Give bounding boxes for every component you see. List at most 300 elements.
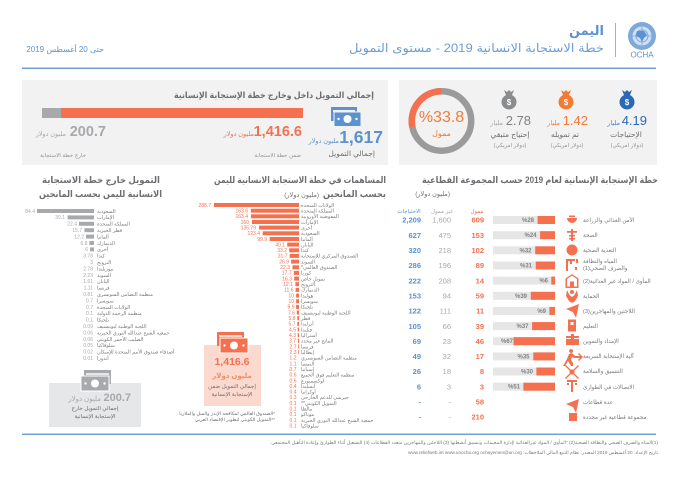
total funding figure: 1,617	[339, 127, 383, 147]
unfunded column: 3	[447, 382, 451, 391]
donor names	[300, 203, 373, 430]
donor names: إسبانيا	[301, 367, 315, 373]
values: 12.2	[74, 234, 84, 240]
requirements column: 2,209	[402, 216, 421, 225]
callout: funding outside the plan: إجمالي التمويل خارج	[72, 406, 119, 412]
funded column: 89	[476, 261, 484, 270]
footnotes: *الصندوق العالمي لمكافحة الإيدز والسل والملاريا	[179, 411, 275, 417]
values: 0.4	[290, 384, 297, 390]
values: 15.7	[72, 228, 82, 234]
donor names: أصدقاء صندوق الأمم المتحدة للإسكان	[97, 349, 175, 356]
panel: funding outside the plan by donor	[25, 175, 175, 427]
values: 39.1	[55, 215, 65, 221]
donor names: موناكو	[300, 412, 314, 418]
values: 33.2	[277, 248, 287, 254]
values: 16.3	[282, 276, 292, 282]
callout: funding outside the plan: 200.7	[103, 392, 131, 404]
values: 2.23	[83, 273, 93, 279]
requirements column: -	[418, 413, 422, 422]
inside plan figure: 1,416.6	[254, 124, 302, 140]
sector labels: التعليم	[583, 324, 598, 330]
donut chart: percent funded: %33.8	[419, 109, 464, 126]
requirements column: 222	[408, 276, 421, 285]
icon: education	[568, 320, 576, 332]
donor names: الصندوق العالمي*	[301, 265, 337, 271]
donor names: النرويج	[97, 260, 111, 266]
requirements column: 153	[408, 292, 421, 300]
donor names: أوكرانيا	[301, 389, 316, 396]
heading: التمويل خارج خطة الاستجابة	[42, 175, 160, 186]
donor names: إيطاليا	[301, 350, 315, 356]
sector labels: الأمن الغذائي والزراعة	[583, 216, 635, 224]
donor names: ألمانيا	[301, 236, 313, 243]
donor names: اللجنة الوطنية ليونيسيف	[97, 324, 147, 330]
total funding figure: مليون دولار	[308, 138, 339, 145]
stat: funded	[546, 90, 588, 149]
unfunded column: 218	[438, 246, 451, 255]
icon: nutrition	[566, 244, 578, 256]
donor names: بلجيكا	[301, 305, 313, 311]
donor names: فرنسا	[301, 344, 314, 350]
callout: funding within the plan: إجمالي التمويل ضمن	[208, 384, 256, 390]
values: 0.81	[83, 292, 93, 298]
values: 11.6	[284, 288, 294, 294]
callout: funding within the plan: 1,416.6	[214, 356, 250, 368]
donor names: ألمانيا	[97, 233, 109, 240]
stat: funded: 1.42	[563, 113, 588, 128]
icon: health	[567, 229, 577, 241]
stacked funding bar	[42, 108, 303, 118]
icon: food security	[567, 216, 577, 223]
values: 6.8	[81, 241, 88, 247]
inside plan figure	[223, 124, 302, 159]
donor names: الإمارات	[97, 215, 114, 221]
values: 5.8	[289, 316, 296, 322]
sector labels: عدة قطاعات	[583, 400, 613, 406]
sector labels: مجموعة قطاعية غير محددة	[583, 415, 646, 421]
outside plan figure: 200.7	[70, 124, 106, 140]
stat: funded: (دولار امريكي)	[551, 142, 584, 149]
unfunded column: -	[448, 413, 452, 422]
unfunded column: 196	[438, 261, 451, 270]
icon: money bag grey: $	[507, 98, 512, 107]
values: 0.09	[83, 324, 93, 330]
donor names: منظمة التضامن السويسري	[301, 356, 357, 362]
funded column: 46	[476, 337, 484, 346]
icon: shelter	[566, 274, 578, 288]
values: 0.1	[290, 412, 297, 418]
percent funded bars: %35	[517, 354, 530, 360]
funded column: 8	[480, 367, 484, 376]
donor names: النرويج	[301, 282, 315, 288]
donor names: الصندوق المركزي للإستجابة	[301, 254, 358, 260]
donor names: فنلندا	[301, 327, 313, 333]
stat: requirements	[606, 90, 647, 149]
donor names: قطر	[300, 316, 311, 322]
funded column: 102	[471, 246, 484, 255]
column headers: ممول	[471, 209, 484, 215]
heading: إجمالي التمويل داخل وخارج خطة الإستجابة الإنسانية	[174, 90, 374, 101]
values: 12.1	[283, 282, 293, 288]
icon: coordination	[565, 365, 579, 379]
outside plan figure	[35, 124, 106, 159]
inside plan figure: ضمن خطة الاستجابة	[254, 153, 301, 159]
outside plan figure: مليون دولار	[35, 131, 66, 138]
bar chart: donors within the plan	[198, 203, 373, 430]
donor names: المانح غير محدد	[301, 339, 333, 345]
values: 6	[85, 247, 88, 253]
donor names: سلوفاكيا	[97, 343, 115, 349]
outside plan figure: خارج خطة الاستجابة	[40, 153, 86, 159]
donor names: كوريا	[301, 271, 312, 277]
heading: خطة الإستجابة الإنسانية لعام 2019 حسب المجموعة القطاعية	[422, 175, 658, 186]
icon: rapid response	[563, 349, 583, 366]
values: 0.7	[86, 305, 93, 311]
sector labels: المأوى / المواد غير الغذائية(2)	[583, 277, 651, 285]
stat: unmet need	[489, 90, 531, 149]
header	[22, 22, 656, 69]
callout: funding outside the plan: الإستجابة الإنسانية	[74, 414, 116, 420]
values: 163.6	[235, 208, 248, 214]
sector labels	[583, 216, 651, 421]
unfunded column	[432, 216, 452, 422]
stat: requirements: 4.19	[622, 113, 647, 128]
values: 0.02	[83, 350, 93, 356]
donor names: الدنمارك	[301, 288, 319, 294]
unfunded column: 475	[438, 231, 451, 240]
icon: water and sanitation	[566, 259, 578, 271]
donor names: منظمة الرحمة الدولية	[97, 311, 142, 317]
stat: unmet need: 2.78	[506, 113, 531, 128]
donut chart: percent funded: ممول	[432, 129, 451, 138]
donor names: السعودية	[301, 231, 320, 237]
values: 0.05	[83, 343, 93, 349]
requirements column: 6	[417, 382, 421, 391]
requirements column: 286	[408, 261, 421, 270]
percent funded bars: %51	[508, 385, 521, 391]
values: 0.1	[290, 407, 297, 413]
icon: refugees and migrants	[566, 304, 579, 318]
icon: OCHA logo	[628, 22, 656, 60]
requirements column	[402, 216, 422, 422]
source and links: تاريخ الإعداد: 20 أغسطس 2019 المصدر: نظام التتبع المالي الملاحظات: www.reliefweb.int www.unocha.org ochayemen@un.org	[408, 449, 659, 456]
percent funded bars: %37	[516, 324, 529, 330]
values: 2.78	[83, 266, 93, 272]
values: 22.3	[280, 265, 290, 271]
values: 0.6	[290, 373, 297, 379]
callout: funding within the plan: مليون دولار	[211, 373, 252, 380]
donor names	[97, 209, 175, 362]
percent funded bars	[493, 216, 555, 391]
donor names: المملكة المتحدة	[97, 222, 130, 228]
donor names: مالطا	[301, 407, 313, 413]
values: 40.1	[275, 242, 285, 248]
values: 3	[90, 260, 93, 266]
sector labels: التغذية الصحية	[583, 248, 617, 254]
values: 7.6	[288, 310, 295, 316]
percent funded bars: %6	[539, 279, 549, 285]
unfunded column: 111	[440, 307, 451, 316]
donor names: الولايات المتحدة	[301, 203, 334, 209]
donor names: السويد	[97, 273, 111, 279]
donor names: سويسرا	[301, 299, 318, 305]
requirements column: 49	[413, 352, 421, 361]
donor names: سلوفاكيا	[301, 424, 319, 430]
funded column: 58	[476, 398, 484, 406]
stat: unmet need: مليار	[489, 120, 503, 127]
funded column: 210	[471, 413, 484, 422]
icon: banknotes orange	[217, 332, 248, 353]
values: 84.4	[25, 209, 35, 215]
callout: funding within the plan: الإستجابة الإنسانية	[211, 392, 253, 398]
percent funded bars: %24	[524, 233, 537, 239]
unfunded column: -	[448, 398, 452, 406]
unfunded column: 32	[443, 352, 451, 361]
values: 4.5	[289, 327, 296, 333]
sector labels: المياه والنظافة	[583, 259, 617, 265]
values: 31.7	[278, 254, 288, 260]
percent funded bars: %9	[537, 309, 547, 315]
total funding figure: إجمالي التمويل	[328, 149, 375, 158]
values: 0.06	[83, 330, 93, 336]
requirements column: 627	[408, 231, 421, 240]
values: 1.1	[290, 361, 297, 367]
unfunded column: 94	[443, 292, 451, 300]
donor names: السويد	[301, 259, 315, 265]
donor names: المفوضية الأوروبية	[301, 213, 339, 220]
donor names: كندا	[97, 254, 106, 260]
inside plan figure: مليون دولار	[223, 131, 254, 138]
funded column: 3	[480, 382, 484, 391]
donor names: الدنمارك	[97, 241, 115, 247]
icon: logistics	[566, 334, 579, 345]
donor names: الولايات المتحدة	[97, 305, 130, 311]
donor names: منظمة التضامن السويسري	[97, 292, 153, 298]
funded column: 17	[476, 352, 484, 361]
values: 0.06	[83, 337, 93, 343]
values: 0.1	[86, 311, 93, 317]
unfunded column: 1,600	[432, 216, 451, 225]
stat: funded: تم تمويله	[551, 130, 579, 139]
values: 3.7	[289, 339, 296, 345]
requirements column: 320	[408, 246, 421, 255]
donor names: جيرسي للدعم الخارجي	[301, 395, 349, 401]
values: 123.4	[247, 231, 260, 237]
percent funded bars: %32	[519, 248, 532, 254]
heading: (مليون دولار)	[284, 192, 319, 199]
unfunded column: 23	[443, 337, 451, 346]
donor names: جمعية الشيخ عبدالله النوري الخيرية	[97, 330, 169, 336]
funded column: 39	[476, 322, 484, 331]
unfunded column: 18	[443, 367, 451, 376]
icon: not specified	[569, 413, 577, 421]
sector labels: التنسيق والسلامة	[583, 369, 623, 375]
stat: requirements: (دولار امريكي)	[611, 142, 644, 149]
panel: funding level summary	[399, 80, 657, 165]
footnotes	[179, 411, 275, 423]
percent funded bars: %28	[522, 218, 535, 224]
values: 1.2	[290, 356, 297, 362]
donor names: المملكة المتحدة	[301, 208, 334, 214]
donor names: النمسا	[301, 361, 314, 367]
heading: المساهمات في خطة الاستجابة الانسانية لليمن	[214, 175, 386, 186]
heading: بحسب المانحين	[323, 189, 386, 200]
donor names: سويسرا	[97, 298, 114, 304]
values: 4.3	[289, 333, 296, 339]
requirements column: 105	[408, 322, 421, 331]
stat: requirements: مليار	[606, 120, 620, 127]
sector notes: (1)المياه والصرف الصحي والنظافة الصحية(2) "المأوى / المواد غيرالغذائية /إدارة المخيمات وتنسيق أنشطتها (3) اللاجئين والمهاجرين متعدد القطاعات (4) التشغيل أثناء الطوارئ وإعادة التأهيل المجتمعي.	[270, 439, 658, 446]
sector labels: الحماية	[583, 294, 600, 300]
values: 2.3	[290, 350, 297, 356]
values	[25, 209, 93, 362]
sector labels: آلية الإستجابة السريعة	[583, 353, 634, 360]
donor names: أيرلندا	[301, 321, 314, 328]
column headers: الاحتياجات	[397, 209, 421, 215]
stat: requirements: الإحتياجات	[610, 130, 642, 139]
donor names: تمويل خاص	[301, 276, 326, 282]
values: 0.4	[290, 390, 297, 396]
donor names: أستراليا	[301, 332, 317, 339]
sector labels: الإمداد والتموين	[583, 339, 619, 345]
donor names: فرنسا	[97, 286, 110, 292]
donor names: لوكسمبورغ	[301, 378, 325, 384]
values	[198, 203, 297, 430]
panel: contributions to the plan by donor	[179, 175, 386, 430]
sector labels: اللاجئين والمهاجرين(3)	[583, 309, 635, 315]
funded column	[471, 216, 485, 422]
donor names: الصليب الأحمر الكويتي	[97, 336, 143, 343]
funded column: 609	[471, 216, 484, 225]
percent funded bars: %39	[515, 294, 528, 300]
donor names: بلجيكا	[97, 318, 109, 324]
stat: unmet need: (دولار امريكي)	[494, 142, 527, 149]
values: 0.7	[290, 367, 297, 373]
values: 0.1	[290, 418, 297, 424]
donor names: التمويل الكويتي**	[301, 401, 337, 407]
stat: unmet need: إحتياج متبقي	[490, 130, 530, 139]
title: اليمن	[569, 23, 604, 38]
requirements column: -	[418, 398, 422, 406]
unfunded column: 208	[438, 276, 451, 285]
sector labels: الصحة	[583, 233, 598, 239]
donor names: أندورا	[97, 355, 109, 362]
icon: banknotes	[331, 107, 361, 126]
funded column: 153	[471, 231, 484, 240]
values: 1.11	[84, 286, 93, 292]
percent funded bars: %31	[520, 264, 533, 270]
icon: banknotes grey	[81, 370, 111, 391]
donor names: كندا	[301, 248, 310, 254]
column headers: غير ممول	[431, 209, 453, 215]
donor names: أخرى	[97, 246, 109, 253]
panel: sector funding table	[397, 175, 658, 422]
sector icons	[563, 216, 583, 421]
values: 22.4	[67, 222, 77, 228]
values: 0.6	[290, 378, 297, 384]
values: 0.7	[86, 298, 93, 304]
values: 0.01	[83, 356, 93, 362]
requirements column: 26	[413, 367, 421, 376]
icon: emergency telecoms	[567, 380, 577, 392]
column headers	[397, 209, 484, 215]
donor names: قطر الخيرية	[97, 228, 123, 234]
values: 5.7	[289, 322, 296, 328]
values: 288.7	[198, 203, 211, 209]
values: 10	[288, 293, 294, 299]
requirements column: 69	[413, 337, 421, 346]
values: 9.9	[288, 305, 295, 311]
values: 3.78	[83, 254, 93, 260]
heading: الانسانية لليمن بحسب المانحين	[39, 189, 162, 200]
donor names: السعودية	[97, 209, 116, 215]
values: 135.79	[241, 225, 256, 231]
donor names: منظمة التعليم فوق الجميع	[301, 373, 355, 379]
footer	[22, 434, 659, 456]
callout: funding outside the plan: مليون دولار	[67, 396, 101, 403]
percent funded bars: %30	[521, 370, 534, 376]
values: 99.9	[257, 237, 267, 243]
values: 0.1	[290, 401, 297, 407]
icon: multi-sector	[566, 399, 579, 413]
values: 0.1	[290, 424, 297, 430]
values: 1.61	[83, 279, 93, 285]
values: 10	[288, 299, 294, 305]
donor names: آيسلندا	[301, 383, 316, 390]
donor names: أخرى	[301, 224, 313, 231]
heading	[39, 175, 162, 200]
donor names: نيوزيلندا	[97, 266, 113, 272]
callout: funding within the plan	[204, 332, 261, 406]
values: 17.7	[282, 271, 292, 277]
donor names: اليابان	[97, 279, 110, 285]
bar chart: donors outside the plan	[25, 209, 175, 362]
icon: protection	[566, 290, 578, 302]
total funding figure	[308, 127, 383, 158]
icon: money bag blue: $	[625, 98, 630, 107]
funded column: 14	[476, 276, 485, 285]
donut chart: percent funded	[412, 91, 471, 151]
donor names: جمعية الشيخ عبدالله النوري الخيرية	[301, 418, 373, 424]
footnotes: **التمويل الكويتي لتطوير الإقتصاد العربي	[195, 417, 275, 423]
funded column: 59	[476, 292, 484, 300]
donor names: اللجنة الوطنية ليونيسيف	[301, 310, 351, 316]
sector labels: الاتصالات في الطوارئ	[583, 385, 635, 391]
funded column: 11	[476, 307, 484, 316]
sector labels: والصرف الصحي(1)	[583, 266, 628, 272]
donor names: اليابان	[301, 242, 314, 248]
stat: funded: مليار	[546, 120, 560, 127]
values: 26.9	[279, 259, 289, 265]
values: 0.1	[86, 318, 93, 324]
unfunded column: 66	[443, 322, 451, 331]
icon: OCHA logo: OCHA	[630, 50, 654, 60]
percent funded bars: %67	[501, 339, 514, 345]
date: حتى 20 أغسطس 2019	[26, 44, 104, 54]
values: 0.3	[290, 395, 297, 401]
values: 2.7	[290, 344, 297, 350]
unit note: (مليون دولار)	[415, 191, 450, 198]
icon: money bag orange: $	[564, 98, 569, 107]
heading	[214, 175, 386, 200]
panel: total funding inside and outside the plan	[22, 80, 388, 165]
values: 163.4	[235, 214, 248, 220]
callout: funding outside the plan	[49, 370, 141, 427]
donor names: الإمارات	[301, 220, 318, 226]
subtitle: خطة الاستجابة الانسانية 2019 - مستوى التمويل	[349, 41, 604, 56]
donor names: هولندا	[301, 293, 314, 299]
values: 160	[241, 220, 249, 226]
